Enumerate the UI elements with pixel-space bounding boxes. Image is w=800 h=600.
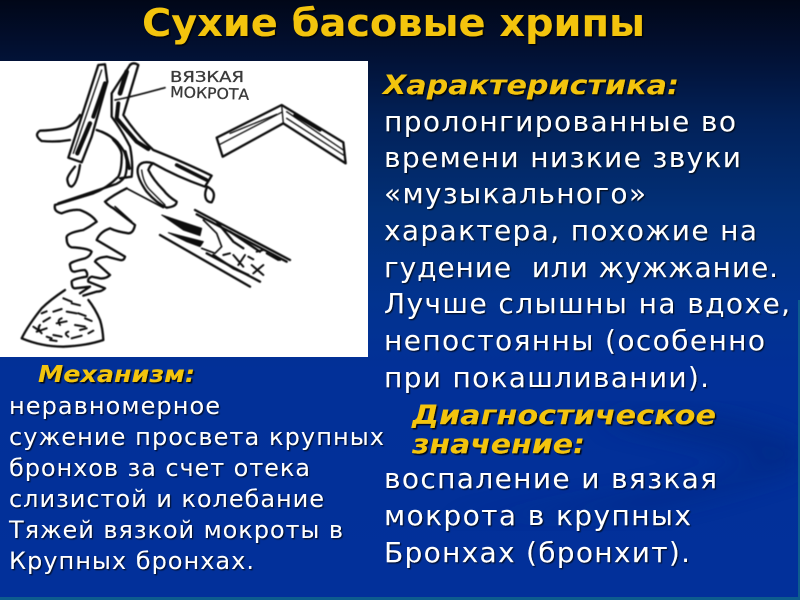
heading: diagnostic value bbox=[411, 400, 716, 460]
text block: mechanism: Крупных бронхах. bbox=[9, 547, 254, 575]
text block: mechanism: слизистой и колебание bbox=[9, 485, 324, 513]
label on illustration: МОКРОТА bbox=[170, 83, 250, 104]
heading: diagnostic value: Диагностическое bbox=[411, 400, 716, 431]
text block: mechanism: бронхов за счет отека bbox=[9, 454, 310, 482]
text block: mechanism bbox=[8, 392, 384, 575]
text block: mechanism: сужение просвета крупных bbox=[9, 423, 384, 451]
L-shaped bronchus fragment bbox=[217, 105, 346, 163]
curved branch bbox=[55, 130, 122, 205]
panel: characteristics bbox=[381, 70, 790, 394]
text block: characteristics: времени низкие звуки bbox=[384, 141, 741, 174]
text block: characteristics: гудение или жужжание. bbox=[384, 251, 778, 284]
illustration: bronchi with viscous sputum bbox=[0, 61, 368, 357]
text block: characteristics: пролонгированные во bbox=[384, 105, 736, 138]
text block: mechanism: неравномерное bbox=[9, 392, 220, 420]
cross-section with arrow bbox=[160, 210, 290, 287]
text block: diagnostic value: воспаление и вязкая bbox=[384, 462, 717, 495]
panel: mechanism bbox=[8, 362, 384, 575]
text block: characteristics bbox=[384, 105, 790, 394]
right bronchial tube bbox=[123, 63, 212, 208]
text block: characteristics: «музыкального» bbox=[384, 177, 646, 210]
side stub and droplet bbox=[37, 115, 80, 141]
text block: characteristics: Лучше слышны на вдохе, bbox=[384, 287, 790, 320]
left bronchial tube bbox=[68, 64, 107, 162]
right zigzag wall bbox=[83, 188, 135, 296]
heading: mechanism: Механизм: bbox=[38, 362, 195, 388]
text block: diagnostic value bbox=[384, 462, 717, 569]
label on illustration bbox=[170, 68, 250, 104]
heading: diagnostic value: значение: bbox=[411, 429, 585, 460]
callout line bbox=[115, 88, 165, 100]
text block: diagnostic value: мокрота в крупных bbox=[384, 499, 691, 532]
text block: characteristics: непостоянны (особенно bbox=[384, 324, 765, 357]
text block: characteristics: характера, похожие на bbox=[384, 214, 757, 247]
text block: diagnostic value: Бронхах (бронхит). bbox=[384, 536, 690, 569]
panel: diagnostic value bbox=[384, 400, 717, 569]
label on illustration: ВЯЗКАЯ bbox=[170, 68, 244, 86]
text block: mechanism: Тяжей вязкой мокроты в bbox=[8, 516, 343, 544]
heading: characteristics: Характеристика: bbox=[381, 70, 679, 101]
title: Сухие басовые хрипы bbox=[142, 1, 645, 45]
text block: characteristics: при покашливании). bbox=[384, 361, 709, 394]
alveolar sac bbox=[22, 290, 103, 347]
left zigzag wall bbox=[55, 205, 97, 293]
